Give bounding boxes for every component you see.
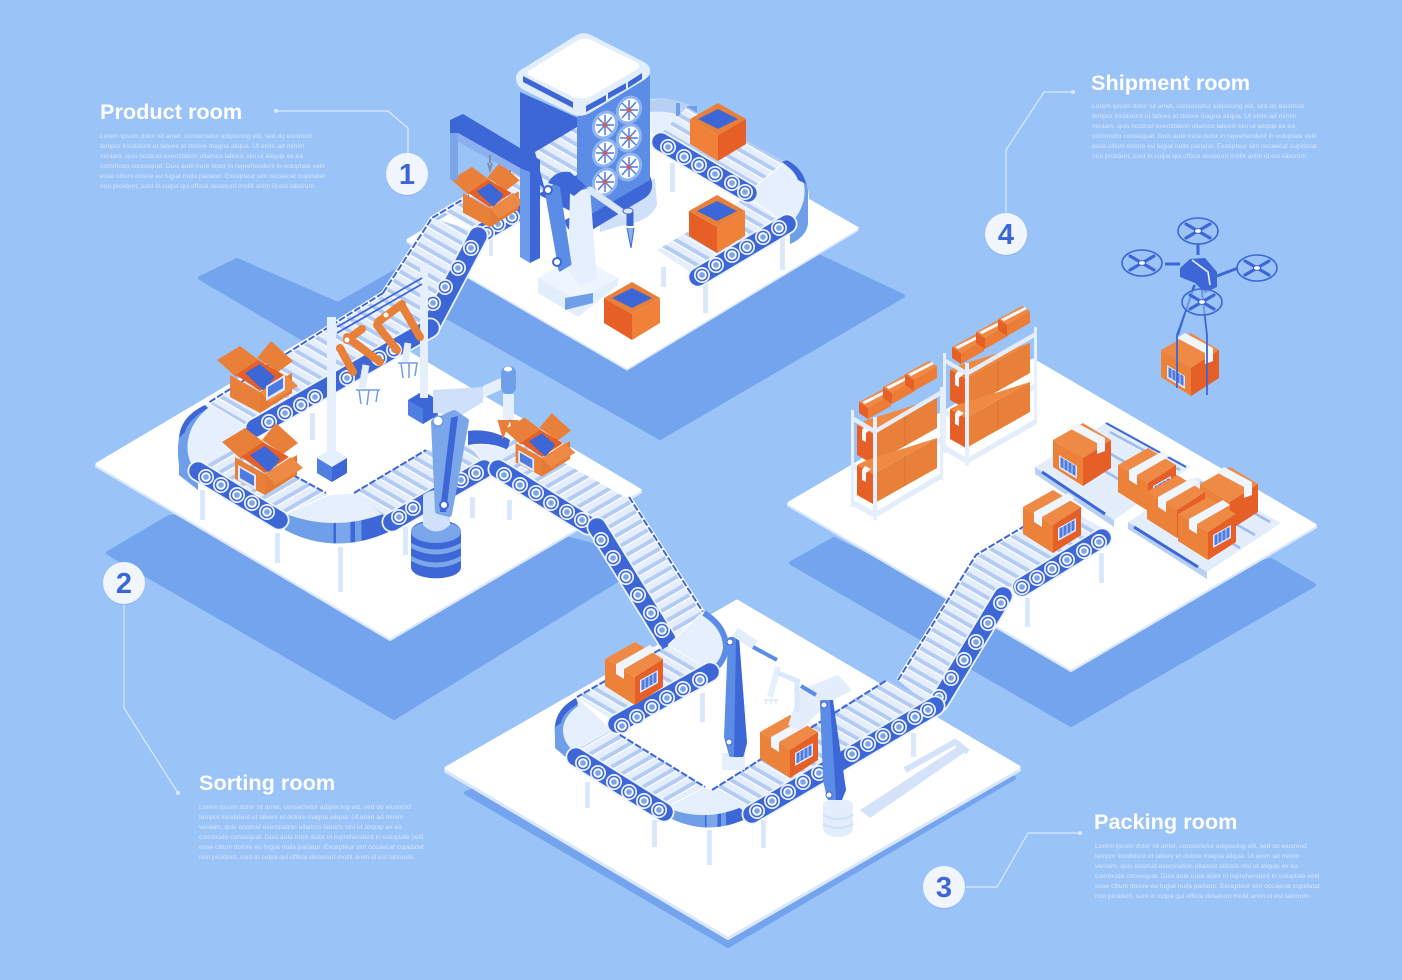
leader line 2	[124, 604, 180, 795]
shelf rack 2	[943, 306, 1037, 466]
robot arm 2 in packing room	[778, 673, 968, 837]
open boxes in sorting room	[217, 341, 575, 495]
text block: packing room: tempor incididunt ut labore et dolore magna aliqua. Ut enim ad minim	[1095, 853, 1300, 860]
parcel on packing conveyor	[605, 642, 663, 705]
heading: product room: Product room	[100, 99, 242, 124]
text block: product room: commodo consequat. Duis aute irure dolor in reprehenderit in voluptate velit	[100, 163, 325, 170]
badge 2	[103, 562, 145, 605]
text block: product room: tempor incididunt ut labore et dolore magna aliqua. Ut enim ad minim	[100, 143, 305, 150]
badge 4: 4	[998, 219, 1014, 251]
sorting robot arm	[411, 366, 518, 578]
robot arm in product room	[538, 172, 634, 317]
drone with parcel	[1122, 218, 1277, 396]
text block: packing room: Lorem ipsum dolor sit amet, consectetur adipiscing elit, sed do eiusmod	[1095, 843, 1307, 850]
open box under gantry	[451, 162, 524, 227]
text block: sorting room: tempor incididunt ut labore et dolore magna aliqua. Ut enim ad minim	[199, 814, 404, 821]
badge 3	[923, 866, 965, 909]
upper flat conveyor and stair to sorting room	[383, 165, 545, 327]
text block: packing room: commodo consequat. Duis aute irure dolor in reprehenderit in voluptate velit	[1095, 873, 1320, 880]
stair wheels rail	[425, 236, 479, 325]
platform: product room floor	[408, 103, 857, 369]
text block: packing room	[1095, 843, 1320, 900]
crate on floor	[604, 282, 660, 340]
leader line 1	[274, 109, 408, 153]
heading: shipment room: Shipment room	[1091, 70, 1250, 95]
badge 4	[985, 213, 1027, 256]
text block: product room: Lorem ipsum dolor sit amet, consectetur adipiscing elit, sed do eiusmod	[100, 133, 312, 140]
floor shadows	[108, 200, 1314, 946]
text block: sorting room: veniam, quis nostrud exercitation ullamco laboris nisi ut aliquip ex ea	[199, 824, 402, 831]
sorting gantry with orange arms	[317, 263, 438, 482]
product room back conveyor	[650, 99, 809, 283]
text block: shipment room: non proident, sunt in culpa qui officia deserunt mollit anim id est laborum.	[1092, 153, 1308, 160]
text block: packing room: veniam, quis nostrud exercitation ullamco laboris nisi ut aliquip ex ea	[1095, 863, 1298, 870]
leader line 3	[966, 831, 1082, 887]
leader line 4	[1006, 90, 1075, 212]
pallet boxes	[1053, 423, 1258, 560]
packing room conveyor loop	[555, 612, 936, 828]
robot arm 1 in packing room	[722, 632, 778, 770]
text block: shipment room: tempor incididunt ut labore et dolore magna aliqua. Ut enim ad minim	[1092, 113, 1297, 120]
platform: shipment room floor	[789, 360, 1315, 670]
shelf rack 1	[851, 361, 943, 520]
text block: shipment room: esse cillum dolore eu fugiat nulla pariatur. Excepteur sint occaecat cupidatat	[1092, 143, 1317, 150]
text block: shipment room: commodo consequat. Duis aute irure dolor in reprehenderit in voluptate velit	[1092, 133, 1317, 140]
text block: packing room: non proident, sunt in culpa qui officia deserunt mollit anim id est laborum.	[1095, 893, 1311, 900]
text block: sorting room: non proident, sunt in culpa qui officia deserunt mollit anim id est laborum.	[199, 854, 415, 861]
gantry frame	[450, 114, 540, 263]
text block: shipment room: Lorem ipsum dolor sit amet, consectetur adipiscing elit, sed do eiusmod	[1092, 103, 1304, 110]
stair conveyor to packing room	[590, 497, 703, 645]
text block: product room: esse cillum dolore eu fugiat nulla pariatur. Excepteur sint occaecat cupidatat	[100, 173, 325, 180]
heading: packing room: Packing room	[1094, 809, 1237, 834]
text block: product room: non proident, sunt in culpa qui officia deserunt mollit anim id est laborum.	[100, 183, 316, 190]
badge 1	[386, 153, 428, 196]
machine with cooling fans	[516, 33, 657, 236]
platform: sorting room floor	[97, 316, 640, 639]
text block: product room	[100, 133, 325, 190]
platform: packing room floor	[446, 601, 1019, 938]
conveyor legs	[200, 163, 1104, 865]
text block: sorting room: commodo consequat. Duis aute irure dolor in reprehenderit in voluptate velit	[199, 834, 424, 841]
text block: packing room: esse cillum dolore eu fugiat nulla pariatur. Excepteur sint occaecat cupidatat	[1095, 883, 1320, 890]
badge 2: 2	[116, 568, 132, 600]
text block: shipment room: veniam, quis nostrud exercitation ullamco laboris nisi ut aliquip ex ea	[1092, 123, 1295, 130]
text block: sorting room: Lorem ipsum dolor sit amet, consectetur adipiscing elit, sed do eiusmod	[199, 804, 411, 811]
open crates on product conveyor	[689, 103, 746, 253]
parcel on shipment conveyor	[1023, 490, 1081, 553]
heading: sorting room: Sorting room	[199, 770, 335, 795]
pallets	[1035, 422, 1281, 579]
text block: sorting room: esse cillum dolore eu fugiat nulla pariatur. Excepteur sint occaecat cupidatat	[199, 844, 424, 851]
text block: shipment room	[1092, 103, 1317, 160]
parcel at packing robot	[760, 715, 818, 778]
badge 1: 1	[399, 159, 415, 191]
stair conveyor to shipment room	[898, 505, 1108, 712]
text block: product room: veniam, quis nostrud exercitation ullamco laboris nisi ut aliquip ex ea	[100, 153, 303, 160]
text block: sorting room	[199, 804, 424, 861]
sorting room conveyor loop	[178, 293, 630, 544]
badge 3: 3	[936, 872, 952, 904]
